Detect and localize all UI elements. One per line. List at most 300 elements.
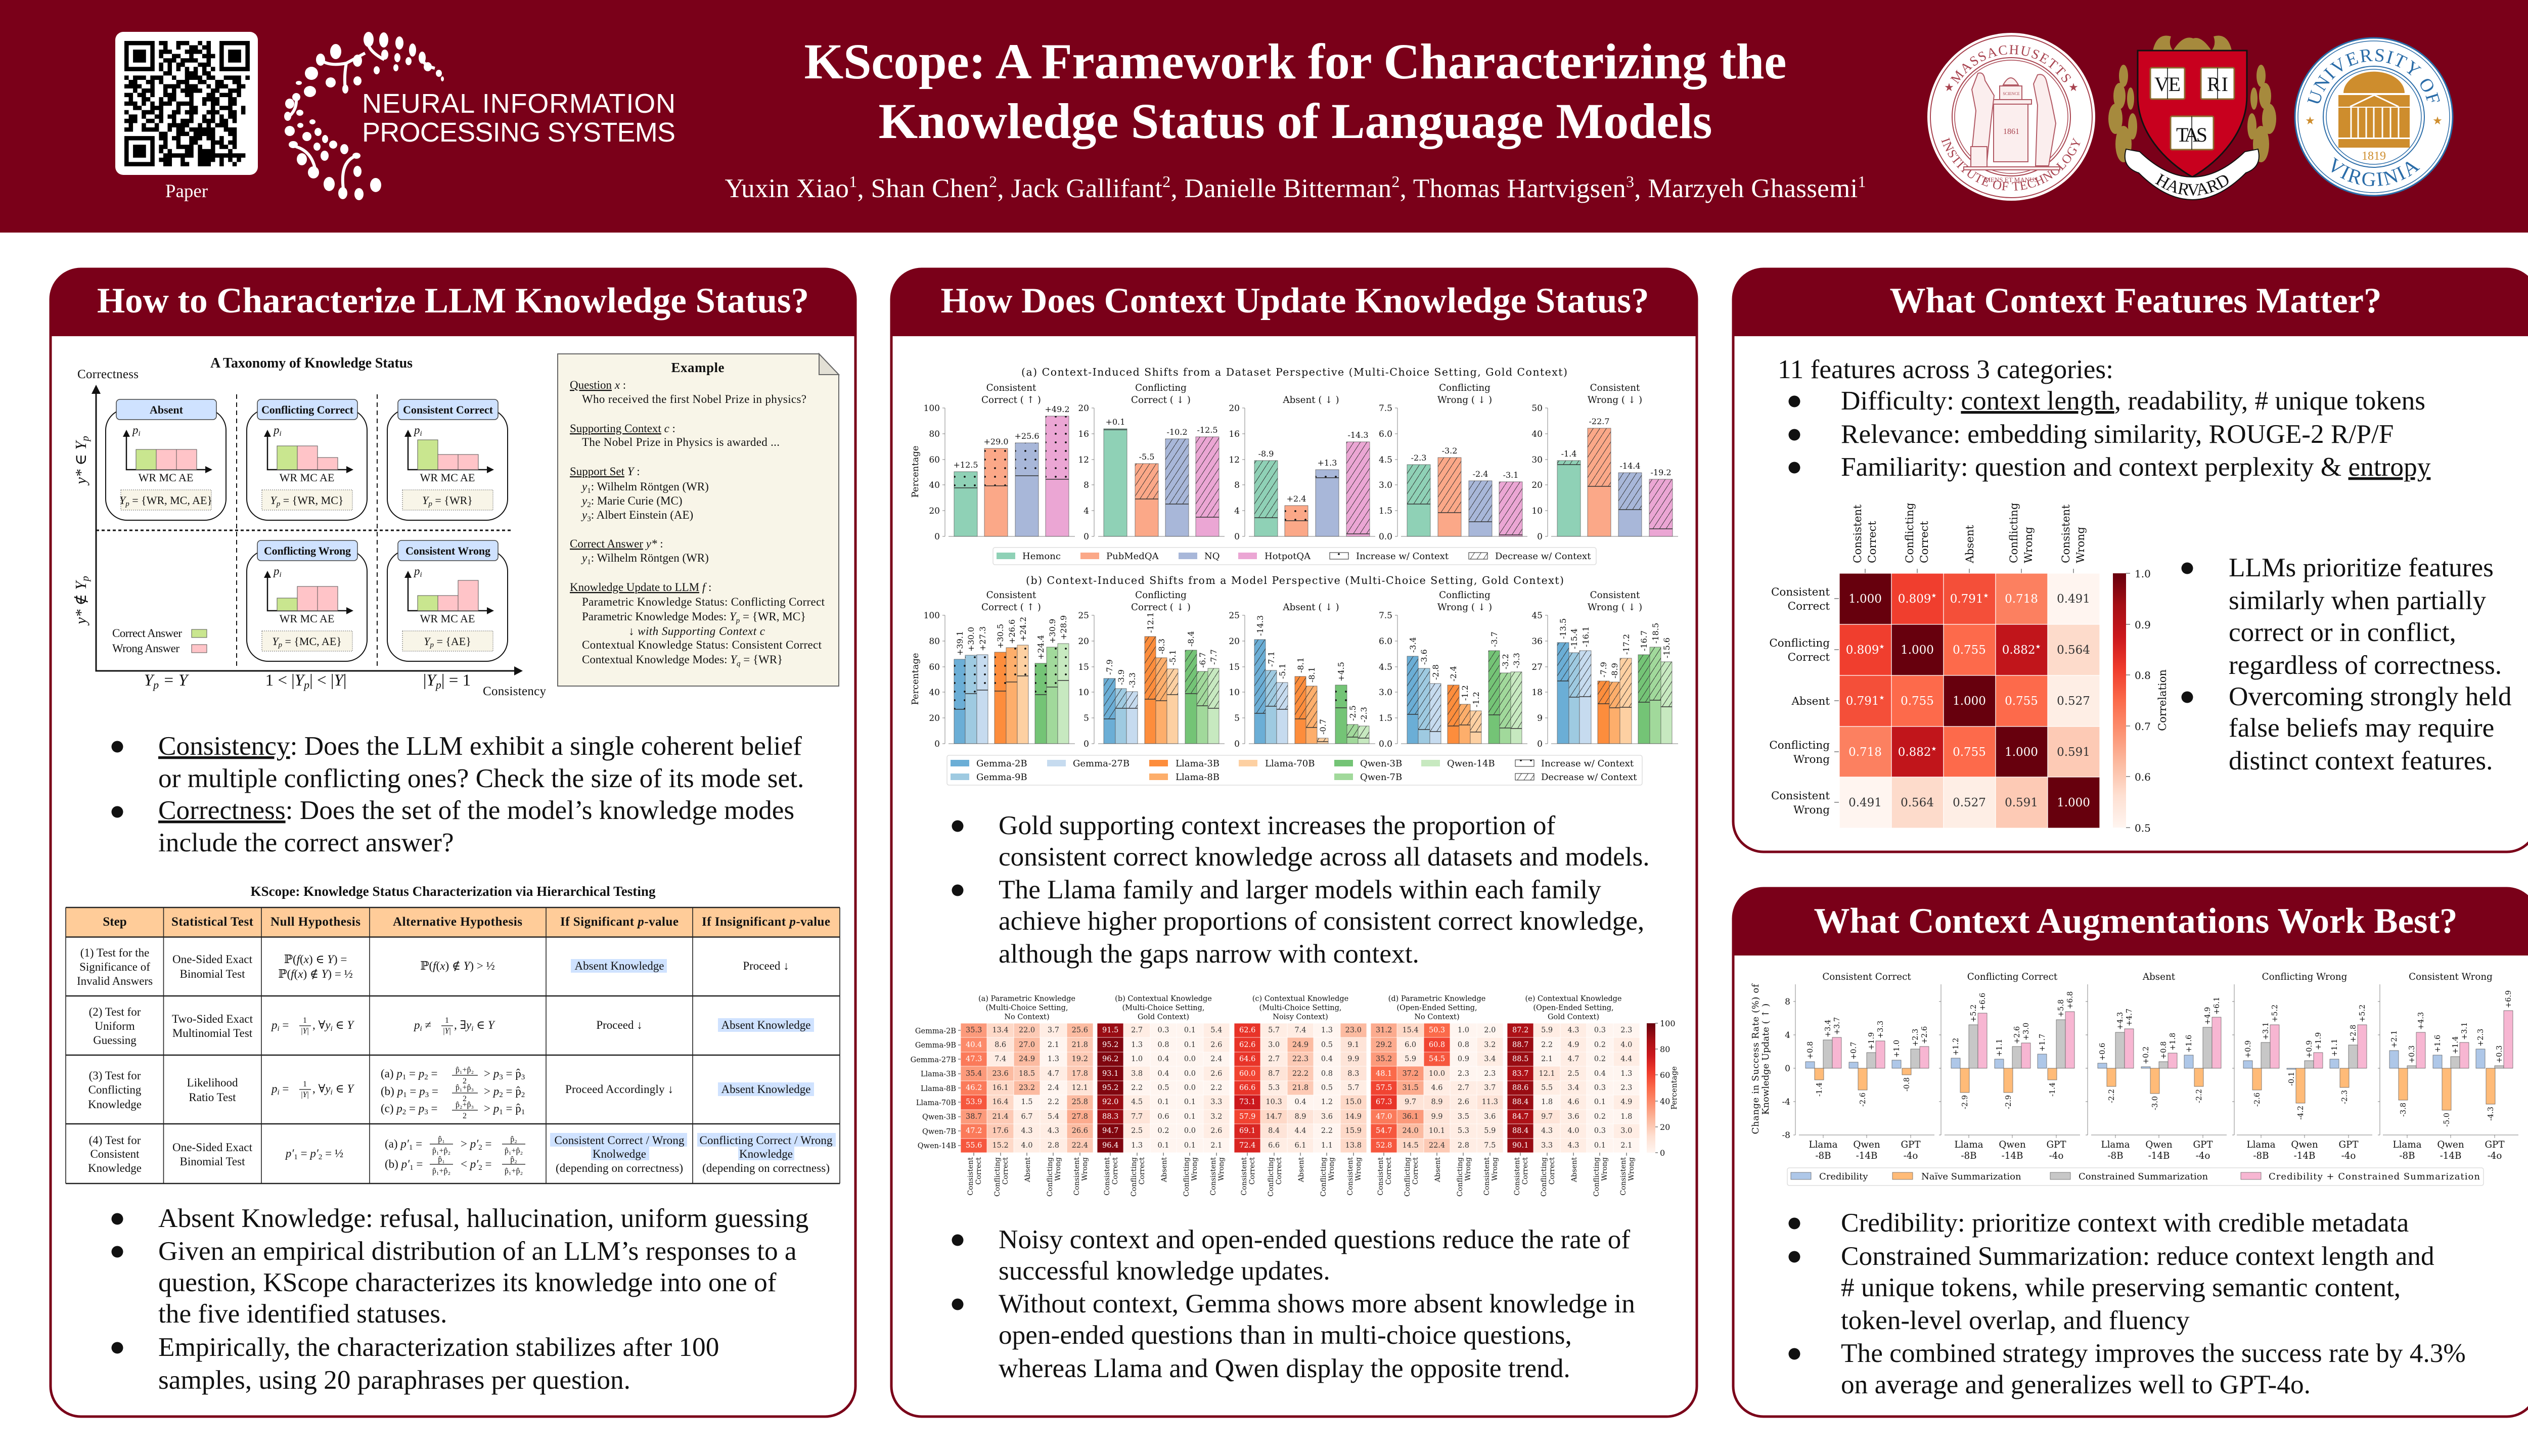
chart b: absent: 0 (1234, 739, 1240, 749)
hierarchical testing table: 3 (499, 1073, 503, 1081)
chart b: consistent correct: 60 (929, 662, 940, 672)
heatmap e: contextual open-ended gold context: 3.0 (1620, 1127, 1632, 1135)
heatmap d: parametric open-ended no context: 2.6 (1458, 1098, 1469, 1106)
example note: : Albert Einstein (AE) (591, 509, 693, 521)
heatmap e: contextual open-ended gold context: 3.4 (1567, 1084, 1579, 1092)
hierarchical testing table: > p′ (461, 1138, 478, 1150)
correlation matrix: 0.882 (1898, 746, 1931, 759)
chart b: absent: -14.3 (1255, 615, 1265, 636)
heatmap d: parametric open-ended no context: 29.2 (1376, 1041, 1392, 1049)
hierarchical testing table: (b) p (381, 1085, 403, 1098)
augmentation chart: consistent correct: Llama (1809, 1140, 1838, 1150)
hierarchical testing table: = (280, 1082, 289, 1095)
text block: gold context findings: consistent correct knowledge across all datasets and models. (999, 842, 1650, 872)
logo: Harvard shield: HARVARD (2155, 173, 2229, 196)
hierarchical testing table: Ratio Test (189, 1091, 236, 1104)
heatmap d: parametric open-ended no context (1371, 1023, 1503, 1153)
heatmap c: contextual multi-choice noisy context: 2.7 (1268, 1055, 1280, 1063)
heatmap colorbar: Percentage (1669, 1066, 1679, 1110)
heatmap e: contextual open-ended gold context: 4.3 (1567, 1142, 1579, 1150)
heatmap d: parametric open-ended no context: 3.2 (1484, 1041, 1496, 1049)
augmentation chart: absent: -2.2 (2108, 1089, 2116, 1103)
chart a: absent: 12 (1229, 455, 1240, 465)
heatmap c: contextual multi-choice noisy context: 9.1 (1347, 1041, 1359, 1049)
chart a: conflicting correct (1078, 383, 1225, 542)
heatmap colorbar: 100 (1660, 1019, 1676, 1028)
heatmap column labels e: Wrong (1601, 1157, 1609, 1181)
heatmap b: contextual multi-choice gold context: 0.4 (1157, 1070, 1169, 1078)
correlation matrix column labels (1852, 503, 2087, 573)
chart a legend: Hemonc (1022, 551, 1061, 562)
heatmap a: parametric multi-choice no context: 12.1 (1072, 1084, 1088, 1092)
chart b: conflicting correct: -3.9 (1116, 669, 1126, 685)
example note: y (581, 552, 588, 564)
heatmap d: parametric open-ended no context: 3.4 (1484, 1055, 1496, 1063)
correlation matrix column labels: Conflicting (2008, 503, 2020, 563)
card: Conflicting Wrong: = {MC, AE} (282, 635, 342, 648)
heatmap e: contextual open-ended gold context: 88.4 (1512, 1127, 1528, 1135)
augmentation chart: conflicting wrong (2232, 972, 2372, 1161)
augmentation chart: consistent correct: -8 (1782, 1130, 1790, 1141)
heatmap d: parametric open-ended no context: 50.3 (1429, 1026, 1445, 1034)
augmentation chart: conflicting wrong: -8B (2253, 1151, 2269, 1161)
heatmap e: contextual open-ended gold context: 4.9 (1567, 1041, 1579, 1049)
hierarchical testing table: = (280, 1019, 289, 1031)
taxonomy legend (112, 627, 207, 655)
example note: 1 (587, 487, 591, 495)
heatmap b: contextual multi-choice gold context: 94.7 (1102, 1127, 1118, 1135)
heatmap b: contextual multi-choice gold context: 0.0 (1184, 1070, 1196, 1078)
augmentation chart: conflicting wrong: -14B (2294, 1151, 2315, 1161)
NeurIPS logo (284, 32, 675, 200)
chart a legend: HotpotQA (1265, 551, 1311, 562)
heatmap d: parametric open-ended no context: 7.5 (1484, 1142, 1496, 1150)
chart a: consistent correct: 20 (929, 506, 940, 516)
heatmap b: contextual multi-choice gold context: 0.0 (1184, 1127, 1196, 1135)
heatmap c: contextual multi-choice noisy context: 62.6 (1239, 1026, 1255, 1034)
hierarchical testing table: p̂₁+p̂₂ (432, 1167, 450, 1175)
heatmap column labels c: Correct (1275, 1157, 1283, 1185)
chart a: absent: 8 (1234, 480, 1240, 490)
chart b: conflicting correct: 10 (1078, 688, 1089, 698)
heatmap b: contextual multi-choice gold context: 0.1 (1184, 1113, 1196, 1121)
hierarchical testing table: Knowledge (88, 1098, 142, 1111)
augmentation chart: consistent correct: 0 (1785, 1064, 1790, 1074)
heatmap column labels a: Consistent (1073, 1157, 1081, 1196)
card: Consistent Correct: i (420, 430, 422, 438)
hierarchical testing table: Likelihood (187, 1076, 238, 1089)
chart a: conflicting wrong: -2.3 (1411, 453, 1426, 463)
correlation colorbar: 0.5 (2135, 822, 2151, 834)
card: Conflicting Correct: Y (270, 494, 278, 507)
hierarchical testing table title: KScope: Knowledge Status Characterization via Hierarchical Testing (251, 884, 656, 899)
heatmap titles: No Context) (1004, 1013, 1050, 1021)
heatmap e: contextual open-ended gold context: 88.5 (1512, 1055, 1528, 1063)
heatmap b: contextual multi-choice gold context: 2.6 (1210, 1070, 1222, 1078)
hierarchical testing table (66, 907, 840, 1184)
hierarchical testing table: > p (484, 1085, 499, 1098)
chart b: conflicting correct: 25 (1078, 611, 1089, 621)
chart a: consistent correct: +49.2 (1045, 404, 1070, 414)
heatmap d: parametric open-ended no context: 60.8 (1429, 1041, 1445, 1049)
hierarchical testing table: (depending on correctness) (556, 1162, 683, 1174)
augmentation chart: consistent wrong: +0.3 (2496, 1045, 2504, 1063)
chart b: conflicting correct (1078, 590, 1225, 749)
logo: MIT seal: 1861 (2003, 127, 2019, 136)
hierarchical testing table: = (413, 1138, 422, 1150)
heatmap d: parametric open-ended no context: 2.3 (1458, 1070, 1469, 1078)
heatmap c: contextual multi-choice noisy context: 9.9 (1347, 1055, 1359, 1063)
hierarchical testing table: (4) Test for (89, 1134, 141, 1147)
chart a: conflicting correct: +0.1 (1106, 417, 1125, 427)
heatmap e: contextual open-ended gold context: 4.3 (1541, 1127, 1553, 1135)
heatmap c: contextual multi-choice noisy context: 62.6 (1239, 1041, 1255, 1049)
heatmap b: contextual multi-choice gold context: 0.3 (1157, 1026, 1169, 1034)
text block: noisy context findings: Without context, Gemma shows more absent knowledge in (999, 1289, 1635, 1318)
heatmap a: parametric multi-choice no context: 24.9 (1019, 1055, 1035, 1063)
heatmap b: contextual multi-choice gold context: 93.1 (1102, 1070, 1118, 1078)
hierarchical testing table: Binomial Test (180, 1155, 245, 1168)
heatmap titles: (Open-Ended Setting, (1533, 1004, 1614, 1012)
card: Consistent Wrong: WR MC AE (420, 612, 475, 625)
text block: augmentation findings: token-level overlap, and fluency (1841, 1305, 2190, 1335)
heatmap c: contextual multi-choice noisy context: 7.4 (1294, 1026, 1306, 1034)
hierarchical testing table: Y (488, 1019, 495, 1031)
chart b: absent: +4.5 (1336, 662, 1346, 681)
text block: augmentation findings: Constrained Summarization: reduce context length and (1841, 1241, 2434, 1271)
chart b: absent: -8.1 (1307, 667, 1317, 682)
chart b: absent: 5 (1234, 713, 1240, 723)
chart b: consistent wrong: 18 (1531, 688, 1543, 698)
example note: 1 (587, 558, 591, 566)
taxonomy axes: p (79, 576, 91, 582)
chart a: consistent correct: 80 (929, 429, 940, 439)
heatmap e: contextual open-ended gold context: 9.7 (1541, 1113, 1553, 1121)
card: Conflicting Correct: Conflicting Correct (261, 403, 354, 416)
correlation matrix: ★ (1931, 592, 1936, 599)
correlation colorbar: 1.0 (2135, 568, 2151, 580)
heatmap row labels: Gemma-27B (911, 1056, 956, 1064)
augmentation chart: consistent correct: -1.4 (1816, 1082, 1824, 1097)
heatmap c: contextual multi-choice noisy context: 3.0 (1268, 1041, 1280, 1049)
example note: The Nobel Prize in Physics is awarded ... (582, 436, 780, 448)
correlation matrix column labels: Absent (1964, 525, 1976, 564)
hierarchical testing table: p̂₁+p̂₂ (456, 1066, 474, 1074)
heatmap titles: (Open-Ended Setting, (1396, 1004, 1477, 1012)
heatmap c: contextual multi-choice noisy context (1234, 1023, 1367, 1153)
heatmap c: contextual multi-choice noisy context: 13.8 (1345, 1142, 1362, 1150)
heatmap a: parametric multi-choice no context: 4.3 (1021, 1127, 1033, 1135)
heatmap b: contextual multi-choice gold context: 0.1 (1184, 1142, 1196, 1150)
hierarchical testing table: Knowledge (88, 1162, 142, 1174)
hierarchical testing table: (3) Test for (89, 1069, 141, 1082)
text block: augmentation findings (1789, 1208, 2466, 1399)
text block: gold context findings: Gold supporting context increases the proportion of (999, 810, 1555, 840)
heatmap e: contextual open-ended gold context: 0.1 (1594, 1098, 1606, 1106)
text block: consistency and correctness bullets (111, 731, 804, 857)
text block: prioritized features: Overcoming strongly held (2229, 681, 2512, 711)
augmentation chart: consistent wrong: Llama (2392, 1140, 2422, 1150)
heatmap d: parametric open-ended no context: 52.8 (1376, 1142, 1392, 1150)
text block: absent knowledge and empirical notes (111, 1203, 808, 1395)
chart a: consistent correct: +25.6 (1014, 431, 1040, 441)
augmentation chart: conflicting wrong: -2.3 (2341, 1090, 2349, 1104)
heatmap b: contextual multi-choice gold context (1097, 1023, 1230, 1153)
augmentation chart: consistent wrong: -14B (2440, 1151, 2461, 1161)
heatmap d: parametric open-ended no context: 31.5 (1402, 1084, 1419, 1092)
chart a: conflicting correct: Correct ( ↓ ) (1131, 395, 1191, 405)
hierarchical testing table: Significance of (79, 961, 150, 973)
card: Consistent Correct: p (414, 424, 420, 436)
chart a: conflicting wrong: 6.0 (1379, 429, 1392, 439)
heatmap a: parametric multi-choice no context: 25.8 (1072, 1098, 1088, 1106)
chart a legend: Increase w/ Context (1356, 551, 1449, 562)
heatmap d: parametric open-ended no context: 54.7 (1376, 1127, 1392, 1135)
correlation matrix: 1.000 (2005, 746, 2038, 759)
correlation matrix row labels: Consistent (1771, 586, 1830, 599)
chart b: consistent wrong: -13.5 (1558, 618, 1568, 639)
heatmap b: contextual multi-choice gold context: 0.0 (1184, 1055, 1196, 1063)
heatmap c: contextual multi-choice noisy context: 8.4 (1268, 1127, 1280, 1135)
heatmap column labels c: Consistent (1240, 1157, 1248, 1196)
logo: Harvard shield: RI (2207, 73, 2228, 96)
hierarchical testing table: p̂₁ (438, 1155, 445, 1164)
augmentation chart: consistent wrong: +1.4 (2452, 1036, 2460, 1054)
example note: 3 (587, 515, 591, 523)
augmentation chart: consistent correct: +0.8 (1807, 1041, 1815, 1059)
chart b: consistent wrong: -16.7 (1639, 630, 1649, 651)
heatmap colorbar (1647, 1019, 1679, 1158)
heatmap d: parametric open-ended no context: 47.0 (1376, 1113, 1392, 1121)
chart b: absent: 25 (1229, 611, 1240, 621)
heatmap c: contextual multi-choice noisy context: 8.9 (1294, 1113, 1306, 1121)
taxonomy axes: Y| (334, 671, 346, 690)
augmentation chart: consistent correct: 8 (1785, 997, 1790, 1007)
augmentation chart: conflicting correct: -8B (1961, 1151, 1977, 1161)
chart b: consistent wrong: -18.5 (1651, 623, 1660, 644)
heatmap b: contextual multi-choice gold context: 2.4 (1210, 1055, 1222, 1063)
correlation matrix: 0.564 (1901, 796, 1934, 809)
heatmap d: parametric open-ended no context: 37.2 (1402, 1070, 1419, 1078)
chart b: conflicting correct: -6.7 (1198, 652, 1207, 668)
augmentation chart: conflicting correct: +1.2 (1952, 1038, 1960, 1056)
chart a: consistent correct: 40 (929, 480, 940, 490)
example note: q (737, 660, 741, 668)
hierarchical testing table: = (482, 1138, 491, 1150)
hierarchical testing table: = (429, 1085, 438, 1098)
heatmap b: contextual multi-choice gold context: 3.8 (1131, 1070, 1143, 1078)
chart b: consistent wrong: Consistent (1590, 590, 1640, 601)
heatmap a: parametric multi-choice no context: 27.0 (1019, 1041, 1035, 1049)
heatmap a: parametric multi-choice no context: 35.3 (966, 1026, 982, 1034)
correlation matrix: 0.718 (1848, 746, 1882, 759)
chart a: consistent correct: 0 (934, 532, 940, 542)
heatmap b: contextual multi-choice gold context: 1.3 (1131, 1041, 1143, 1049)
hierarchical testing table: Two-Sided Exact (172, 1013, 253, 1025)
taxonomy axes: = Y (159, 671, 190, 690)
logo: Harvard shield: TAS (2176, 123, 2207, 146)
panel: context features: What Context Features Matter? (1890, 281, 2381, 321)
panel: how to characterize: How to Characterize LLM Knowledge Status? (97, 281, 809, 321)
hierarchical testing table: p (272, 1019, 277, 1031)
authors: , Thomas Hartvigsen (1400, 174, 1626, 203)
heatmap column labels a: Consistent (967, 1157, 975, 1196)
hierarchical testing table: ∈ (473, 1019, 488, 1031)
example note: Correct Answer y* : (570, 537, 663, 550)
augmentation chart: conflicting correct: Qwen (1999, 1140, 2026, 1150)
QR code (115, 32, 258, 175)
heatmap a: parametric multi-choice no context: 35.4 (966, 1070, 982, 1078)
chart b: consistent wrong: 27 (1531, 662, 1543, 672)
heatmap column labels c: Wrong (1328, 1157, 1336, 1181)
augmentation chart: consistent wrong: +6.9 (2505, 990, 2513, 1008)
chart b: conflicting wrong: 0.0 (1379, 739, 1392, 749)
augmentation chart: consistent wrong: -3.8 (2400, 1103, 2408, 1117)
correlation matrix: 1.000 (1901, 644, 1934, 657)
text block: consistency and correctness bullets: Consistency: Does the LLM exhibit a single coherent belief (158, 731, 802, 761)
chart b: consistent correct: Correct ( ↑ ) (981, 602, 1041, 613)
hierarchical testing table: (c) p (381, 1102, 402, 1115)
chart a y label: Percentage (910, 445, 921, 498)
chart b: conflicting wrong: -3.4 (1408, 637, 1418, 653)
chart b: conflicting correct: -3.3 (1127, 672, 1137, 688)
card: Conflicting Wrong: p (274, 565, 279, 577)
chart a: consistent wrong: -1.4 (1561, 449, 1576, 459)
chart b: conflicting wrong: -1.2 (1471, 692, 1481, 707)
augmentation chart: conflicting correct: +2.6 (2013, 1026, 2021, 1044)
panel: context augmentations (1733, 888, 2528, 1417)
hierarchical testing table: p′ (285, 1147, 294, 1160)
heatmap c: contextual multi-choice noisy context: 4.4 (1294, 1127, 1306, 1135)
authors: 1 (1858, 172, 1866, 191)
augmentation chart: conflicting wrong: +1.9 (2315, 1032, 2323, 1050)
hierarchical testing table: = (482, 1158, 491, 1170)
text block: gold context findings: The Llama family and larger models within each family (999, 875, 1601, 904)
card: Conflicting Correct: i (279, 430, 282, 438)
authors: , Shan Chen (857, 174, 989, 203)
heatmap b: contextual multi-choice gold context: 3.3 (1210, 1098, 1222, 1106)
heatmap b: contextual multi-choice gold context: 0.1 (1184, 1098, 1196, 1106)
hierarchical testing table: , ∀y (312, 1082, 331, 1095)
heatmap titles: (Multi-Choice Setting, (1259, 1004, 1342, 1012)
example note: : Marie Curie (MC) (591, 494, 682, 507)
heatmap e: contextual open-ended gold context: 4.6 (1567, 1098, 1579, 1106)
augmentation chart: consistent correct: +3.4 (1824, 1020, 1832, 1037)
heatmap a: parametric multi-choice no context: 1.3 (1048, 1055, 1059, 1063)
heatmap d: parametric open-ended no context: 10.1 (1429, 1127, 1445, 1135)
heatmap e: contextual open-ended gold context: 90.1 (1512, 1142, 1528, 1150)
correlation matrix row labels: Conflicting (1769, 637, 1830, 650)
heatmap c: contextual multi-choice noisy context: 0.4 (1294, 1098, 1306, 1106)
chart b: conflicting correct: -8.4 (1186, 631, 1196, 647)
text block: feature categories: Relevance: embedding similarity, ROUGE-2 R/P/F (1841, 419, 2394, 449)
taxonomy axes: 1 < |Y (265, 671, 304, 690)
chart b: conflicting wrong: -2.4 (1449, 666, 1458, 681)
hierarchical testing table: 1 (409, 1144, 413, 1152)
example note: Supporting Context c : (570, 422, 675, 435)
heatmap e: contextual open-ended gold context: 88.6 (1512, 1084, 1528, 1092)
augmentation chart: absent: -4o (2196, 1151, 2210, 1161)
heatmap column labels c: Conflicting (1320, 1157, 1328, 1197)
taxonomy axes: p (79, 436, 91, 442)
heatmap titles: (b) Contextual Knowledge (1115, 995, 1212, 1003)
heatmap column labels b (1103, 1153, 1226, 1197)
panel: context update: How Does Context Update Knowledge Status? (940, 281, 1649, 321)
augmentation chart: absent: +0.6 (2099, 1043, 2107, 1061)
example note: p (736, 617, 740, 625)
heatmap b: contextual multi-choice gold context: 2.5 (1131, 1127, 1143, 1135)
heatmap column labels c: Correct (1248, 1157, 1256, 1185)
augmentation chart: consistent correct: -4 (1782, 1097, 1790, 1107)
example note: Example (671, 360, 725, 375)
taxonomy axes: y* ∉ Y (72, 581, 89, 624)
hierarchical testing table: |Y| (301, 1027, 309, 1035)
text block: gold context findings (952, 810, 1650, 969)
chart b: consistent wrong: 36 (1531, 636, 1543, 647)
augmentation chart: consistent wrong: Qwen (2437, 1140, 2464, 1150)
heatmap a: parametric multi-choice no context: 22.0 (1019, 1026, 1035, 1034)
heatmap a: parametric multi-choice no context: 17.6 (992, 1127, 1009, 1135)
hierarchical testing table: 1 (403, 1091, 407, 1099)
heatmap a: parametric multi-choice no context: 46.2 (966, 1084, 982, 1092)
chart a: conflicting wrong: 3.0 (1379, 480, 1392, 490)
chart a: consistent wrong: -19.2 (1650, 468, 1672, 477)
hierarchical testing table: Null Hypothesis (270, 915, 360, 929)
text block: feature categories: Familiarity: question and context perplexity & entropy (1841, 452, 2431, 482)
hierarchical testing table: 2 (319, 1153, 322, 1161)
card: Conflicting Correct (247, 399, 367, 520)
correlation matrix: 0.791 (1950, 593, 1983, 606)
chart b: conflicting wrong (1379, 590, 1527, 749)
heatmap e: contextual open-ended gold context: 88.7 (1512, 1041, 1528, 1049)
augmentation chart: conflicting wrong: +1.1 (2331, 1039, 2339, 1057)
augmentation chart: consistent correct: -4o (1904, 1151, 1918, 1161)
chart b: consistent correct: +30.5 (996, 624, 1005, 649)
card: Consistent Correct: Consistent Correct (403, 403, 493, 416)
augmentation chart: conflicting correct: +6.6 (1979, 993, 1987, 1011)
hierarchical testing table: p′ (309, 1147, 319, 1160)
heatmap e: contextual open-ended gold context: 3.3 (1541, 1142, 1553, 1150)
chart b: consistent correct: +30.9 (1048, 619, 1057, 644)
authors: 3 (1626, 172, 1634, 191)
chart b: consistent correct: 40 (929, 688, 940, 698)
hierarchical testing table: = (428, 1067, 438, 1080)
heatmap e: contextual open-ended gold context: 0.3 (1594, 1026, 1606, 1034)
text block: prioritized features: correct or in conflict, (2229, 617, 2456, 647)
correlation matrix: ★ (1931, 745, 1936, 752)
card: Absent: = {WR, MC, AE} (129, 494, 212, 507)
heatmap d: parametric open-ended no context: 15.4 (1402, 1026, 1419, 1034)
hierarchical testing table: > p (484, 1067, 499, 1080)
hierarchical testing table: p̂₁+p̂₂ (505, 1147, 523, 1155)
heatmap c: contextual multi-choice noisy context: 23.0 (1345, 1026, 1362, 1034)
card: Conflicting Wrong: Conflicting Wrong (264, 544, 351, 557)
card: Consistent Correct (387, 399, 508, 520)
text block: prioritized features (2181, 553, 2512, 776)
hierarchical testing table: i (277, 1025, 280, 1033)
chart b: conflicting correct: -7.7 (1209, 649, 1218, 665)
chart b: consistent wrong: -15.6 (1662, 638, 1672, 658)
text block: consistency and correctness bullets: Correctness: Does the set of the model’s knowledge modes (158, 795, 794, 825)
heatmap e: contextual open-ended gold context: 83.7 (1512, 1070, 1528, 1078)
correlation matrix (1839, 573, 2100, 828)
panel: context features (1733, 269, 2528, 852)
heatmap column labels b: Correct (1138, 1157, 1146, 1185)
chart b: conflicting wrong: 7.5 (1379, 611, 1392, 621)
logo: MIT seal: SCIENCE (2003, 92, 2020, 96)
text block: prioritized features: false beliefs may require (2229, 713, 2494, 743)
taxonomy axes (72, 368, 546, 698)
